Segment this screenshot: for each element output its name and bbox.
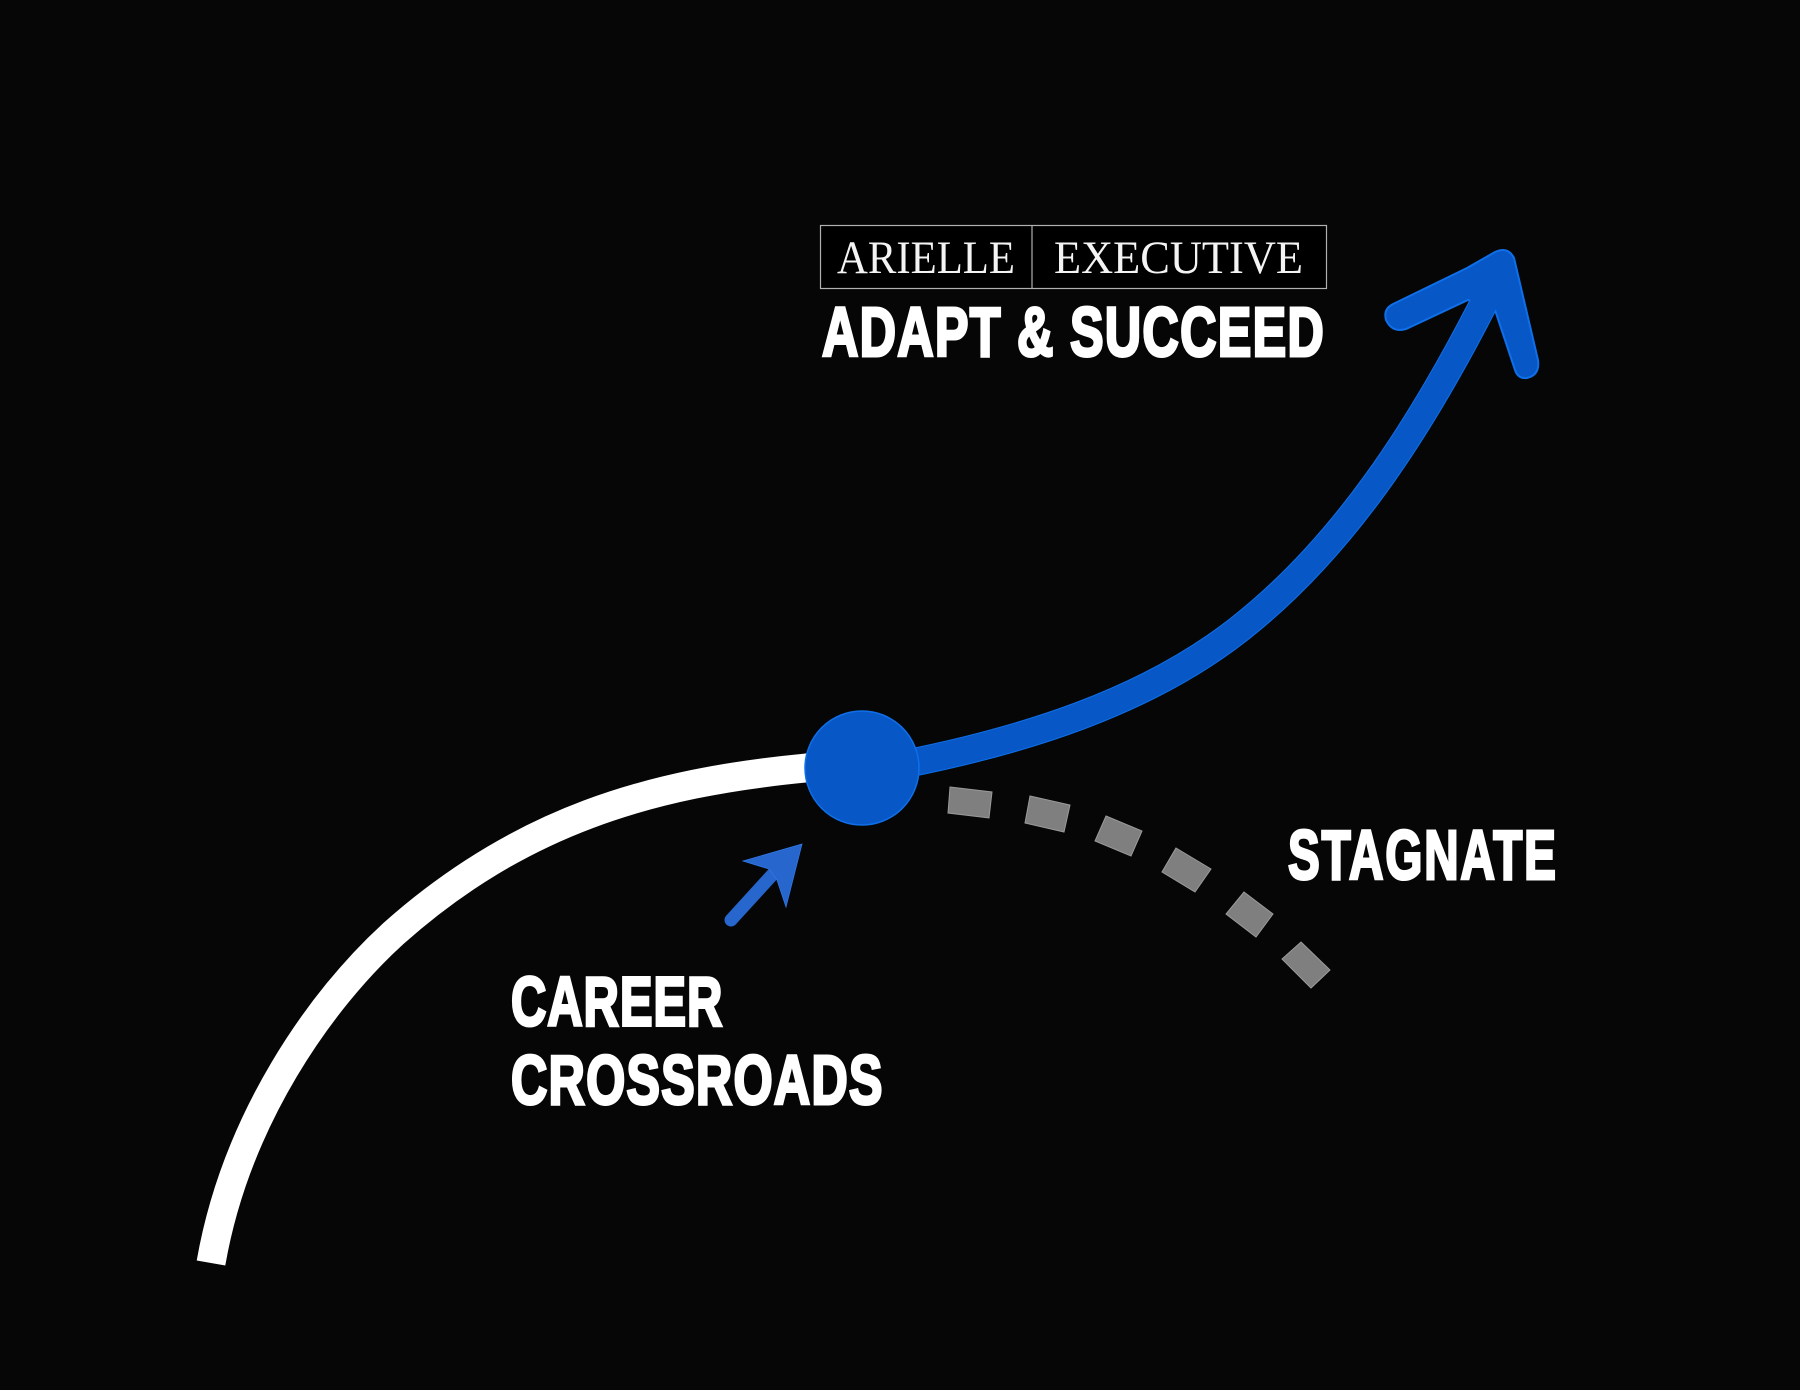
logo: Arielle Executive <box>820 225 1326 289</box>
label: career crossroads: CROSSROADS <box>511 1041 883 1119</box>
label: career crossroads: CAREER <box>511 962 722 1041</box>
white career path curve <box>211 765 830 1263</box>
label: career crossroads <box>511 962 883 1119</box>
logo: Arielle Executive: ARIELLE <box>837 232 1015 284</box>
blue success arrow <box>905 250 1538 764</box>
crossroads circle <box>805 711 919 825</box>
heading: adapt and succeed: ADAPT & SUCCEED <box>822 293 1324 371</box>
stagnate dashed path <box>948 787 1330 988</box>
logo: Arielle Executive: EXECUTIVE <box>1054 232 1303 284</box>
label: stagnate: STAGNATE <box>1288 816 1556 894</box>
small arrow pointing to crossroads <box>731 844 802 920</box>
